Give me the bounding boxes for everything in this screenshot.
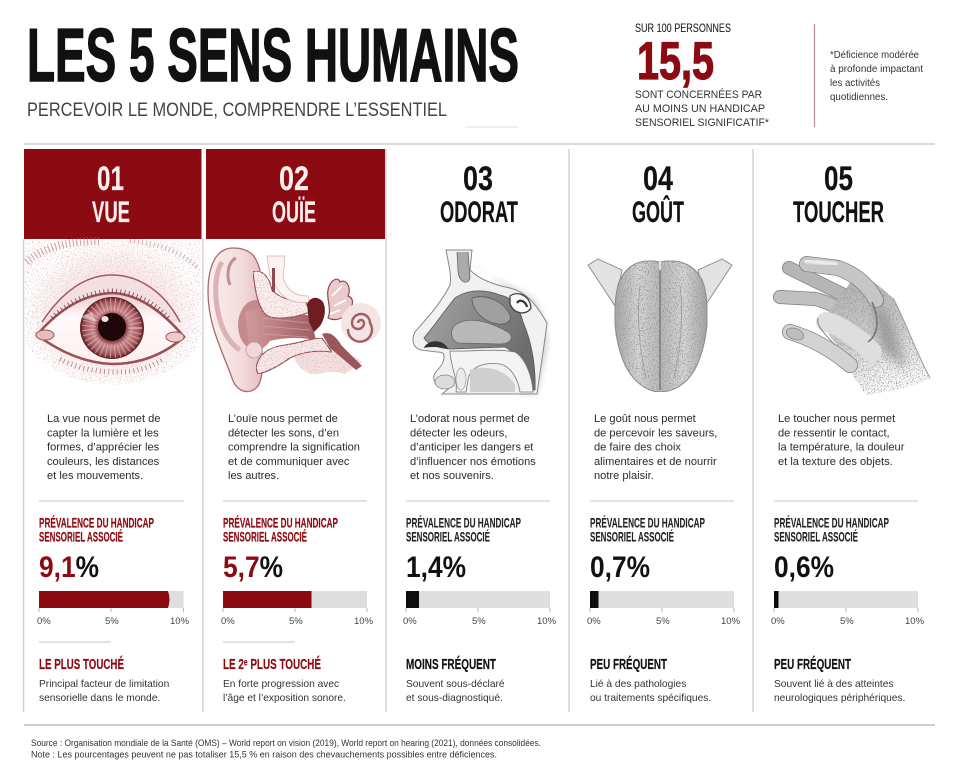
- header: 03 odorat: ODORAT: [440, 196, 518, 229]
- bar chart: [403, 591, 557, 627]
- rank note: [406, 679, 505, 704]
- footnote: à profonde impactant: [830, 64, 923, 75]
- description: couleurs, les distances: [47, 456, 160, 468]
- description: alimentaires et de nourrir: [594, 456, 717, 468]
- prevalence label: PRÉVALENCE DU HANDICAP: [223, 514, 338, 530]
- description: Le toucher nous permet: [778, 413, 895, 425]
- prevalence label: PRÉVALENCE DU HANDICAP: [406, 514, 521, 530]
- description: d’influencer nos émotions: [410, 456, 536, 468]
- panel: odorat: [403, 160, 557, 704]
- icon: hand: [780, 261, 930, 395]
- prevalence label: [223, 514, 338, 544]
- prevalence label: SENSORIEL ASSOCIÉ: [39, 528, 123, 544]
- header: 04 gout: GOÛT: [632, 195, 684, 229]
- column dividers: [24, 149, 753, 712]
- panel: ouie: [206, 149, 385, 704]
- header: 05 toucher: 05: [824, 160, 853, 198]
- rank label: MOINS FRÉQUENT: [406, 656, 496, 673]
- prevalence label: SENSORIEL ASSOCIÉ: [590, 528, 674, 544]
- header: 04 gout: [632, 160, 684, 229]
- bar chart: 10%: [905, 616, 925, 627]
- rank label: PEU FRÉQUENT: [590, 656, 667, 673]
- bar chart: 0%: [771, 616, 785, 627]
- panel: vue: [24, 149, 202, 704]
- prevalence label: PRÉVALENCE DU HANDICAP: [590, 514, 705, 530]
- bar chart: 5%: [840, 616, 854, 627]
- description: formes, d’apprécier les: [47, 442, 160, 454]
- rank note: [774, 679, 905, 704]
- source note: Source : Organisation mondiale de la Santé (OMS) – World report on vision (2019), World report on hearing (2021), données consolidées.: [31, 738, 541, 748]
- description: les autres.: [228, 470, 279, 482]
- description: [47, 413, 160, 482]
- rank note: Principal facteur de limitation: [39, 679, 169, 690]
- value: 0,6%: [774, 551, 834, 584]
- description: [228, 413, 360, 482]
- description: détecter les odeurs,: [410, 428, 507, 440]
- icon: nose cross-section: [413, 250, 548, 394]
- header: 02 ouie: 02: [279, 160, 309, 198]
- rank note: [39, 679, 169, 704]
- rank note: l’âge et l’exposition sonore.: [223, 693, 346, 704]
- prevalence label: [590, 514, 705, 544]
- subtitle: PERCEVOIR LE MONDE, COMPRENDRE L’ESSENTIEL: [27, 100, 447, 121]
- description: la température, la douleur: [778, 442, 905, 454]
- bar chart: 10%: [537, 616, 557, 627]
- description: comprendre la signification: [228, 442, 360, 454]
- description: [410, 413, 536, 482]
- description: de faire des choix: [594, 442, 681, 454]
- header: 05 toucher: TOUCHER: [793, 196, 884, 229]
- rank note: [590, 679, 711, 704]
- rank note: neurologiques périphériques.: [774, 693, 905, 704]
- header: 03 odorat: 03: [463, 160, 493, 198]
- title: LES 5 SENS HUMAINS: [27, 13, 519, 97]
- bar chart: 10%: [721, 616, 741, 627]
- prevalence label: [406, 514, 521, 544]
- bar chart: 5%: [105, 616, 119, 627]
- icon: tongue: [588, 259, 732, 392]
- rank label: LE 2ᵉ PLUS TOUCHÉ: [223, 656, 321, 673]
- description: L’odorat nous permet de: [410, 413, 530, 425]
- description: Le goût nous permet: [594, 413, 696, 425]
- description: et la texture des objets.: [778, 456, 893, 468]
- key statistic callout: SONT CONCERNÉES PAR: [635, 88, 762, 101]
- value: 5,7%: [223, 551, 283, 584]
- description: de ressentir le contact,: [778, 428, 890, 440]
- rank label: PEU FRÉQUENT: [774, 656, 851, 673]
- bar chart: [37, 591, 190, 627]
- prevalence label: SENSORIEL ASSOCIÉ: [406, 528, 490, 544]
- bar chart: 0%: [37, 616, 51, 627]
- header: 02 ouie: [206, 149, 385, 239]
- key statistic callout: [635, 21, 770, 129]
- rank note: [223, 679, 346, 704]
- value: 0,7%: [590, 551, 650, 584]
- rank note: ou traitements spécifiques.: [590, 693, 711, 704]
- prevalence label: SENSORIEL ASSOCIÉ: [774, 528, 858, 544]
- footnote: les activités: [830, 78, 880, 89]
- rank note: sensorielle dans le monde.: [39, 693, 160, 704]
- bar chart: [221, 591, 374, 627]
- header: 01 vue: 01: [97, 160, 124, 198]
- description: et nos souvenirs.: [410, 470, 494, 482]
- description: d’anticiper les dangers et: [410, 442, 533, 454]
- key statistic callout: SENSORIEL SIGNIFICATIF*: [635, 117, 770, 129]
- description: et les mouvements.: [47, 470, 143, 482]
- rank label: LE PLUS TOUCHÉ: [39, 656, 124, 673]
- rank note: Souvent sous-déclaré: [406, 679, 505, 690]
- header: 05 toucher: [793, 160, 884, 229]
- rank note: Lié à des pathologies: [590, 679, 686, 690]
- icon: ear: [208, 248, 381, 392]
- description: [594, 413, 717, 482]
- bar chart: 5%: [656, 616, 670, 627]
- header: 03 odorat: [440, 160, 518, 229]
- source note: Note : Les pourcentages peuvent ne pas totaliser 15,5 % en raison des chevauchements possibles entre déficiences.: [31, 750, 497, 760]
- description: [778, 413, 905, 468]
- bar chart: 10%: [170, 616, 190, 627]
- rank note: En forte progression avec: [223, 679, 339, 690]
- bar chart: 5%: [289, 616, 303, 627]
- footnote: quotidiennes.: [830, 92, 888, 103]
- description: et de communiquer avec: [228, 456, 350, 468]
- description: La vue nous permet de: [47, 413, 160, 425]
- bar chart: [771, 591, 925, 627]
- prevalence label: PRÉVALENCE DU HANDICAP: [39, 514, 154, 530]
- bar chart: [587, 591, 741, 627]
- header: 01 vue: [24, 149, 202, 239]
- key statistic callout: AU MOINS UN HANDICAP: [635, 103, 765, 115]
- description: capter la lumière et les: [47, 428, 159, 440]
- source note: [31, 738, 541, 760]
- bar chart: 0%: [221, 616, 235, 627]
- panel: gout: [587, 160, 741, 704]
- rank note: Souvent lié à des atteintes: [774, 679, 894, 690]
- icon: eye: [25, 241, 201, 385]
- header: 04 gout: 04: [643, 160, 673, 198]
- footnote: [830, 50, 923, 103]
- value: 1,4%: [406, 551, 466, 584]
- description: détecter les sons, d’en: [228, 428, 339, 440]
- prevalence label: [774, 514, 889, 544]
- bar chart: 10%: [354, 616, 374, 627]
- bar chart: 5%: [472, 616, 486, 627]
- rank note: et sous-diagnostiqué.: [406, 693, 503, 704]
- bar chart: 0%: [403, 616, 417, 627]
- panel: toucher: [771, 160, 930, 704]
- value: 9,1%: [39, 551, 99, 584]
- prevalence label: [39, 514, 154, 544]
- key statistic callout: 15,5: [637, 32, 714, 91]
- description: notre plaisir.: [594, 470, 654, 482]
- prevalence label: SENSORIEL ASSOCIÉ: [223, 528, 307, 544]
- description: L’ouïe nous permet de: [228, 413, 338, 425]
- header: 01 vue: VUE: [92, 196, 130, 229]
- bar chart: 0%: [587, 616, 601, 627]
- key statistic callout: SUR 100 PERSONNES: [635, 21, 731, 35]
- footnote: *Déficience modérée: [830, 50, 919, 61]
- description: de percevoir les saveurs,: [594, 428, 717, 440]
- header: 02 ouie: OUÏE: [272, 196, 316, 229]
